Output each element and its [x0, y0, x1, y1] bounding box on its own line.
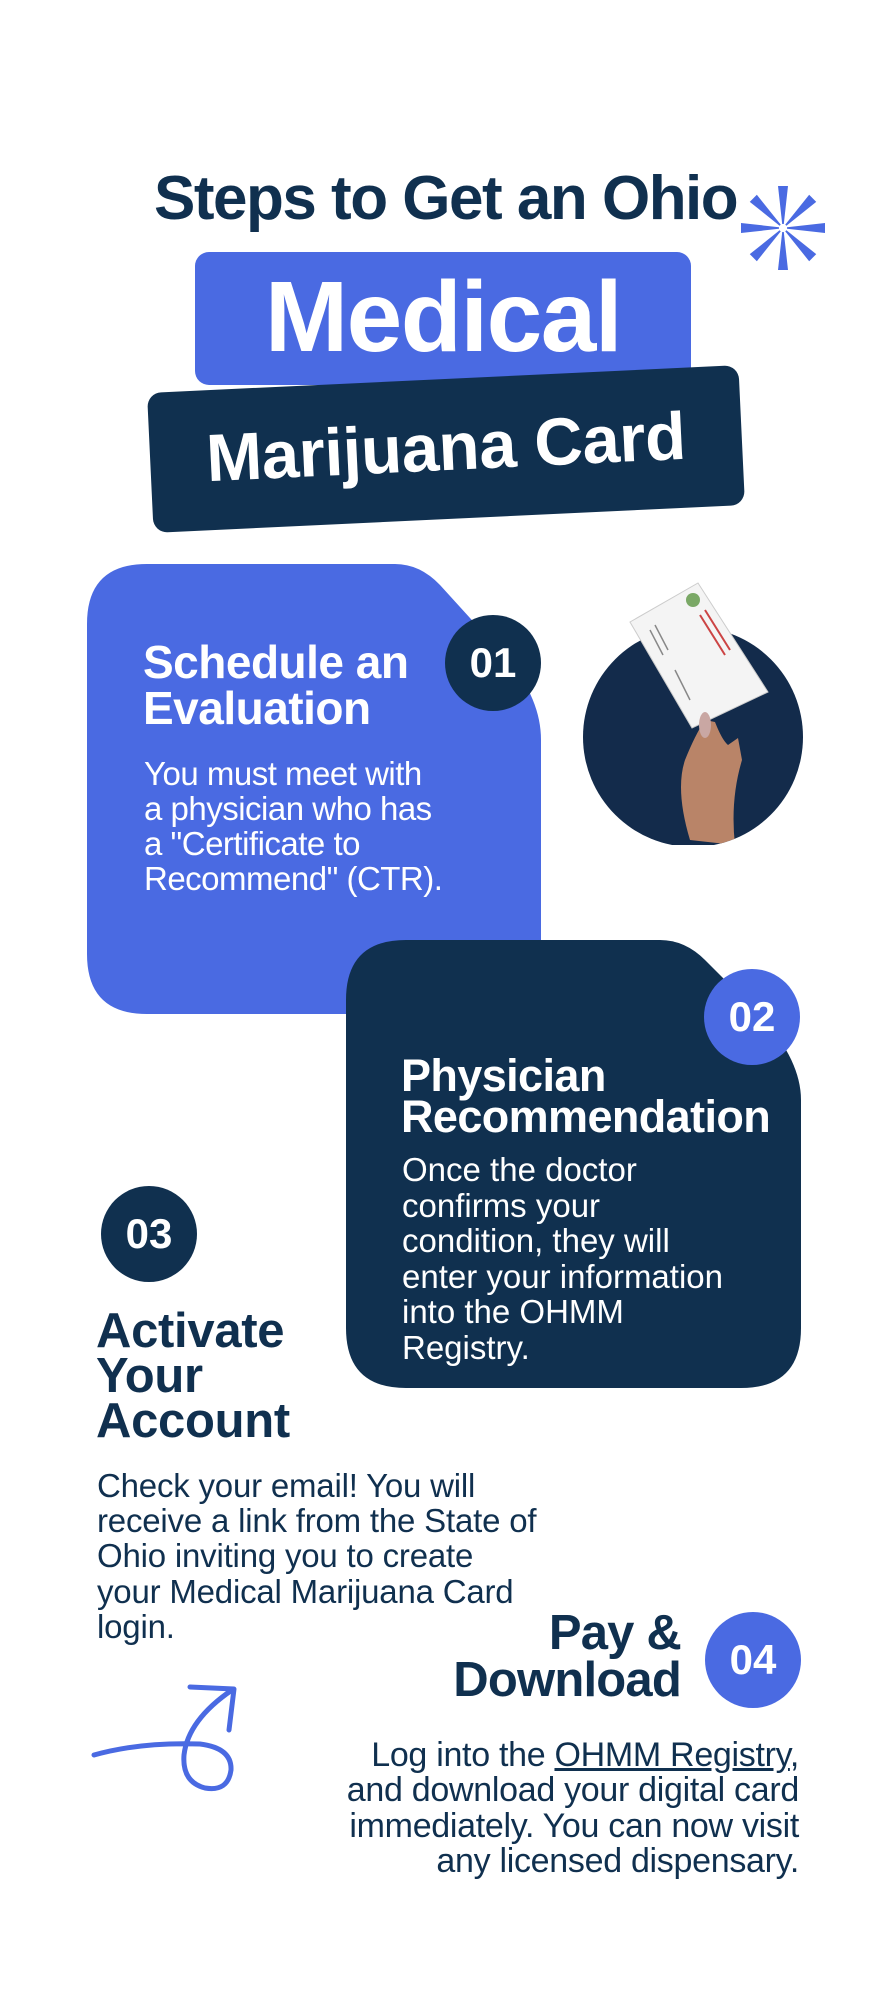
step 2 text: condition, they will: [402, 1222, 670, 1259]
step 2 text: enter your information: [402, 1258, 723, 1294]
heading box: Marijuana Card: [147, 365, 745, 533]
step 1 text: You must meet with: [144, 755, 422, 792]
icon: asterisk burst: [741, 186, 825, 270]
step 3 text: Ohio inviting you to create: [97, 1537, 473, 1574]
step 3 heading: Account: [96, 1394, 290, 1448]
step 1 heading: [143, 636, 408, 734]
badge 01: 01: [470, 639, 516, 686]
step 4 block: [347, 1606, 801, 1880]
step 1 heading: Schedule an: [143, 636, 408, 688]
arrow: looped hand-drawn: [92, 1684, 236, 1792]
photo: hand holding card: [583, 582, 803, 845]
step 4 heading: Pay &: [549, 1606, 681, 1660]
step 4 heading: [453, 1606, 681, 1707]
step 4 text: immediately. You can now visit: [349, 1807, 799, 1845]
step 2 heading: Recommendation: [401, 1091, 770, 1142]
step 3 heading: Activate: [96, 1304, 284, 1358]
step 2 text: into the OHMM: [402, 1293, 624, 1330]
step 3 text: Check your email! You will: [97, 1467, 475, 1504]
step 1 text: Recommend" (CTR).: [144, 860, 442, 897]
step 2 heading: Physician: [401, 1050, 606, 1101]
step 3 block: [96, 1186, 537, 1645]
step 2 text: Registry.: [402, 1328, 530, 1366]
step 4 text: [347, 1736, 800, 1880]
step 3 text: your Medical Marijuana Card: [97, 1573, 513, 1610]
step 3 heading: Your: [96, 1349, 203, 1403]
badge 02: [704, 969, 800, 1065]
panel: step 1: [87, 564, 541, 1014]
step 3 text: receive a link from the State of: [97, 1502, 536, 1539]
step 1 heading: Evaluation: [143, 682, 371, 734]
badge 02: 02: [729, 993, 775, 1040]
badge 04: 04: [730, 1636, 776, 1683]
step 4 text: any licensed dispensary.: [436, 1842, 799, 1880]
step 4 text: Log into the OHMM Registry,: [371, 1736, 799, 1774]
heading box: Marijuana Card: Marijuana Card: [205, 399, 687, 496]
title line: Steps to Get an Ohio: [154, 164, 737, 233]
step 4 text: and download your digital card: [347, 1771, 799, 1809]
step 2 text: Once the doctor: [402, 1151, 637, 1188]
step 3 text: login.: [97, 1608, 175, 1645]
step 1 text: a "Certificate to: [144, 825, 360, 862]
step 2 text: [402, 1151, 723, 1366]
step 2 text: confirms your: [402, 1186, 600, 1224]
step 1 text: a physician who has: [144, 790, 432, 827]
step 1 text: [144, 755, 442, 897]
heading box: Medical: Medical: [265, 261, 621, 373]
panel: step 2: [346, 940, 801, 1388]
heading box: Medical: [195, 252, 691, 385]
badge 03: [101, 1186, 197, 1282]
badge 03: 03: [126, 1210, 172, 1257]
badge 01: [445, 615, 541, 711]
step 3 text: [97, 1467, 537, 1645]
step 3 heading: [96, 1304, 290, 1448]
step 4 heading: Download: [453, 1653, 681, 1707]
step 2 heading: [401, 1050, 770, 1142]
badge 04: [705, 1612, 801, 1708]
